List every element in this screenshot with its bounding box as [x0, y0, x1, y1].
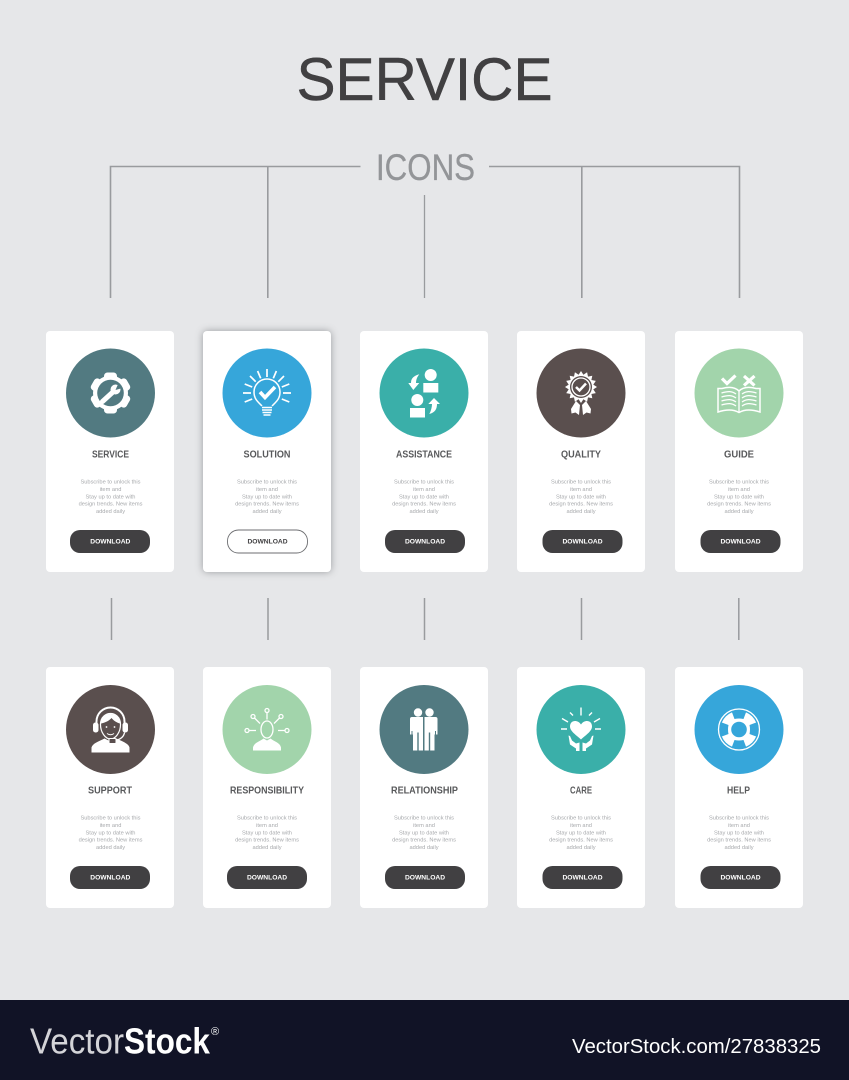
title: SERVICE — [296, 46, 552, 113]
description: solution: Stay up to date with — [242, 494, 292, 500]
button: download: DOWNLOAD — [720, 875, 761, 882]
description: solution: design trends. New items — [235, 502, 299, 508]
icon circle: responsibility — [222, 685, 312, 774]
label: responsibility: RESPONSIBILITY — [230, 786, 304, 797]
card: quality — [517, 331, 645, 572]
button: download — [385, 866, 465, 889]
card: responsibility — [203, 667, 331, 908]
icon: head with network nodes — [245, 708, 289, 750]
description: help: added daily — [724, 845, 754, 851]
description: assistance: added daily — [409, 509, 439, 515]
footer logo: VectorStock: ® — [211, 1026, 219, 1038]
button: download outlined — [228, 530, 308, 553]
icon: award badge — [565, 371, 597, 415]
button: download: DOWNLOAD — [90, 875, 131, 882]
description: responsibility: design trends. New items — [235, 838, 299, 844]
button: download — [542, 866, 622, 889]
description: solution: item and — [256, 487, 278, 493]
label: service: SERVICE — [92, 450, 129, 460]
button: download: DOWNLOAD — [720, 539, 761, 546]
button: download — [700, 866, 780, 889]
card: care — [517, 667, 645, 908]
subtitle: icons: ICONS — [376, 147, 475, 188]
icon: heart in hands — [561, 708, 601, 751]
icon: gear and wrench — [89, 372, 132, 414]
description: care: item and — [570, 823, 592, 829]
button: download: DOWNLOAD — [562, 539, 603, 546]
description: responsibility: Subscribe to unlock this — [237, 816, 297, 822]
footer logo: VectorStock: Vector — [30, 1020, 124, 1062]
footer logo: VectorStock: Stock — [124, 1020, 211, 1062]
button: download — [542, 530, 622, 553]
button: download: DOWNLOAD — [90, 539, 131, 546]
description: relationship: Stay up to date with — [399, 830, 449, 836]
icon circle: assistance — [380, 348, 468, 438]
description: support: Subscribe to unlock this — [80, 816, 141, 822]
label: solution: SOLUTION — [244, 450, 290, 460]
description: service: design trends. New items — [79, 502, 143, 508]
description: service: Subscribe to unlock this — [80, 480, 141, 486]
footer bar — [0, 1000, 849, 1080]
button: download — [227, 866, 307, 889]
icon: light bulb — [243, 369, 291, 415]
label: assistance: ASSISTANCE — [396, 450, 452, 460]
icon circle: support — [66, 685, 155, 774]
description: relationship: Subscribe to unlock this — [394, 816, 454, 822]
icon circle: quality — [536, 348, 626, 438]
description: assistance: Subscribe to unlock this — [394, 480, 454, 486]
description: help: item and — [728, 823, 750, 829]
icon: headset agent — [92, 708, 130, 752]
description: care: Stay up to date with — [556, 830, 606, 836]
description: guide: added daily — [724, 509, 754, 515]
description: care: added daily — [566, 845, 596, 851]
icon: open book — [718, 376, 760, 412]
connector lines: between rows — [112, 598, 739, 640]
description: assistance: Stay up to date with — [399, 494, 449, 500]
label: guide: GUIDE — [724, 450, 754, 460]
description: support: design trends. New items — [79, 838, 143, 844]
icon circle: guide — [694, 348, 784, 438]
icon: two people — [410, 708, 438, 750]
description: guide: Stay up to date with — [714, 494, 764, 500]
description: support: Stay up to date with — [86, 830, 135, 836]
icon circle: service — [66, 348, 155, 438]
button: download — [700, 530, 780, 553]
description: service: Stay up to date with — [86, 494, 135, 500]
button: download: DOWNLOAD — [247, 875, 287, 882]
label: support: SUPPORT — [88, 786, 132, 797]
description: assistance: item and — [413, 487, 435, 493]
description: care: Subscribe to unlock this — [551, 816, 611, 822]
footer url: VectorStock.com/27838325 — [572, 1035, 821, 1058]
description: help: Stay up to date with — [714, 830, 764, 836]
card: relationship — [360, 667, 488, 908]
description: service: item and — [100, 487, 121, 493]
description: help: Subscribe to unlock this — [709, 816, 769, 822]
footer logo: VectorStock — [30, 1020, 219, 1062]
icon circle: help — [694, 685, 784, 774]
description: quality: added daily — [566, 509, 596, 515]
description: responsibility: added daily — [252, 845, 282, 851]
description: relationship: design trends. New items — [392, 838, 456, 844]
description: quality: Subscribe to unlock this — [551, 480, 611, 486]
description: relationship: item and — [413, 823, 435, 829]
button: download — [70, 866, 150, 889]
card: guide — [675, 331, 803, 572]
description: guide: item and — [728, 487, 750, 493]
description: quality: design trends. New items — [549, 502, 613, 508]
description: help: design trends. New items — [707, 838, 771, 844]
description: assistance: design trends. New items — [392, 502, 456, 508]
description: quality: Stay up to date with — [556, 494, 606, 500]
button: download outlined: DOWNLOAD — [247, 539, 288, 546]
label: quality: QUALITY — [561, 450, 601, 460]
description: support: added daily — [96, 845, 125, 851]
description: solution: Subscribe to unlock this — [237, 480, 297, 486]
description: responsibility: item and — [256, 823, 278, 829]
description: service: added daily — [96, 509, 125, 515]
button: download — [70, 530, 150, 553]
description: responsibility: Stay up to date with — [242, 830, 292, 836]
icon circle: relationship — [380, 685, 468, 774]
button: download — [385, 530, 465, 553]
card: solution highlighted — [203, 331, 331, 572]
label: help: HELP — [727, 786, 750, 797]
card: help — [675, 667, 803, 908]
card: support — [46, 667, 174, 908]
label: care: CARE — [570, 786, 592, 797]
icon circle: solution — [222, 348, 312, 438]
card: assistance — [360, 331, 488, 572]
button: download: DOWNLOAD — [405, 875, 445, 882]
icon: people exchange — [408, 369, 440, 418]
description: guide: design trends. New items — [707, 502, 771, 508]
icon circle: care — [536, 685, 626, 774]
button: download: DOWNLOAD — [562, 875, 603, 882]
description: support: item and — [100, 823, 121, 829]
connector lines: top bracket — [110, 166, 740, 298]
card: service — [46, 331, 174, 572]
description: guide: Subscribe to unlock this — [709, 480, 769, 486]
icon: lifebuoy — [718, 709, 760, 750]
description: relationship: added daily — [409, 845, 439, 851]
description: care: design trends. New items — [549, 838, 613, 844]
label: relationship: RELATIONSHIP — [391, 786, 458, 797]
description: quality: item and — [570, 487, 592, 493]
description: solution: added daily — [252, 509, 282, 515]
button: download: DOWNLOAD — [405, 539, 445, 546]
